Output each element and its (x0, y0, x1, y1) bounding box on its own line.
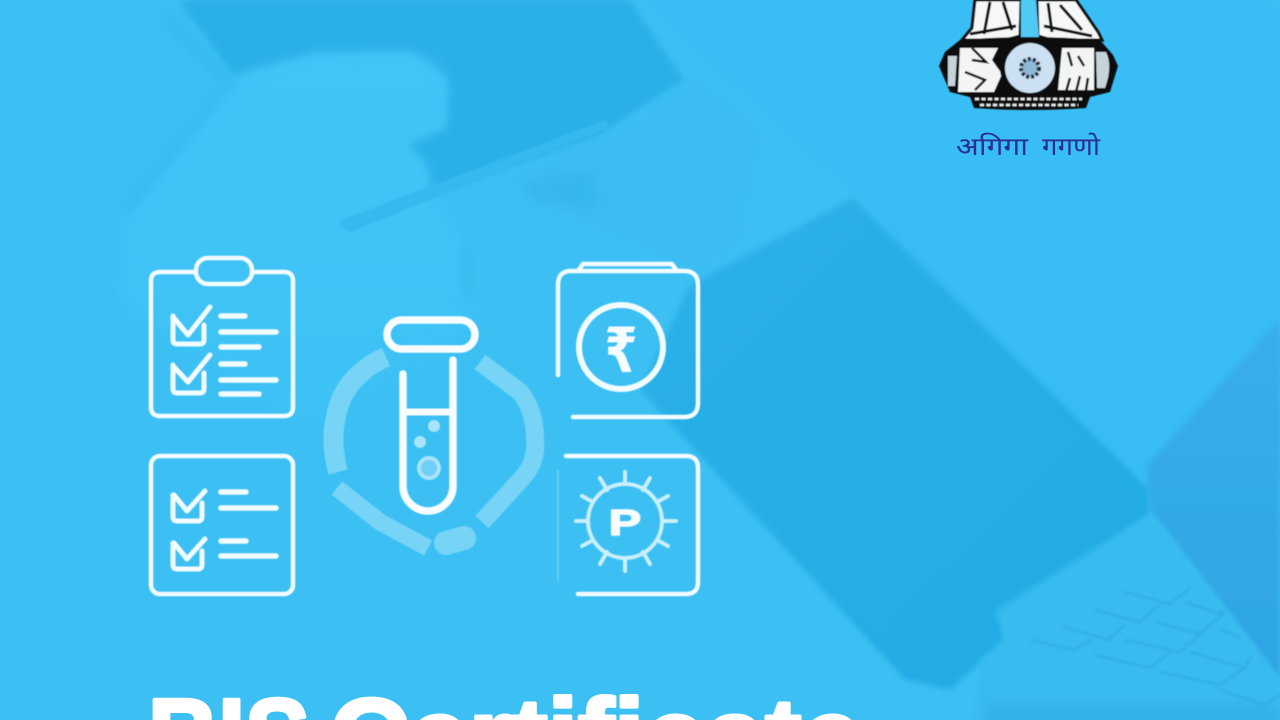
icon: germ test card (558, 456, 698, 594)
dharma wheel (1000, 38, 1060, 98)
icon: checklist clipboard (151, 258, 293, 416)
germ body (576, 472, 676, 571)
icon: test tube with ring (333, 320, 535, 548)
background: writing hand (120, 53, 470, 420)
background: laptop screen right panel (1146, 318, 1280, 680)
background: keyboard deck (975, 514, 1280, 720)
test tube (387, 320, 475, 511)
ring of arrows around tube (333, 357, 535, 548)
background: laptop screen (640, 198, 1150, 690)
base dots (975, 99, 1082, 105)
emblem: Ashoka lion capital (939, 0, 1118, 110)
background: keyboard keys (1030, 588, 1280, 705)
motto (956, 132, 1101, 161)
background: tablet (178, 0, 684, 195)
abacus base (939, 37, 1118, 110)
background: second hand (510, 80, 760, 270)
rupee sign: ₹ (604, 315, 638, 388)
icon: checklist card (151, 456, 293, 594)
background: hand shadows (124, 15, 467, 300)
lion legs (962, 0, 1102, 40)
background: stylus (340, 120, 610, 232)
motto: अगिगा (956, 132, 1029, 161)
motto: गगणो (1042, 132, 1101, 161)
germ symbol: P (609, 503, 641, 543)
icon: rupee fee card (558, 264, 698, 417)
